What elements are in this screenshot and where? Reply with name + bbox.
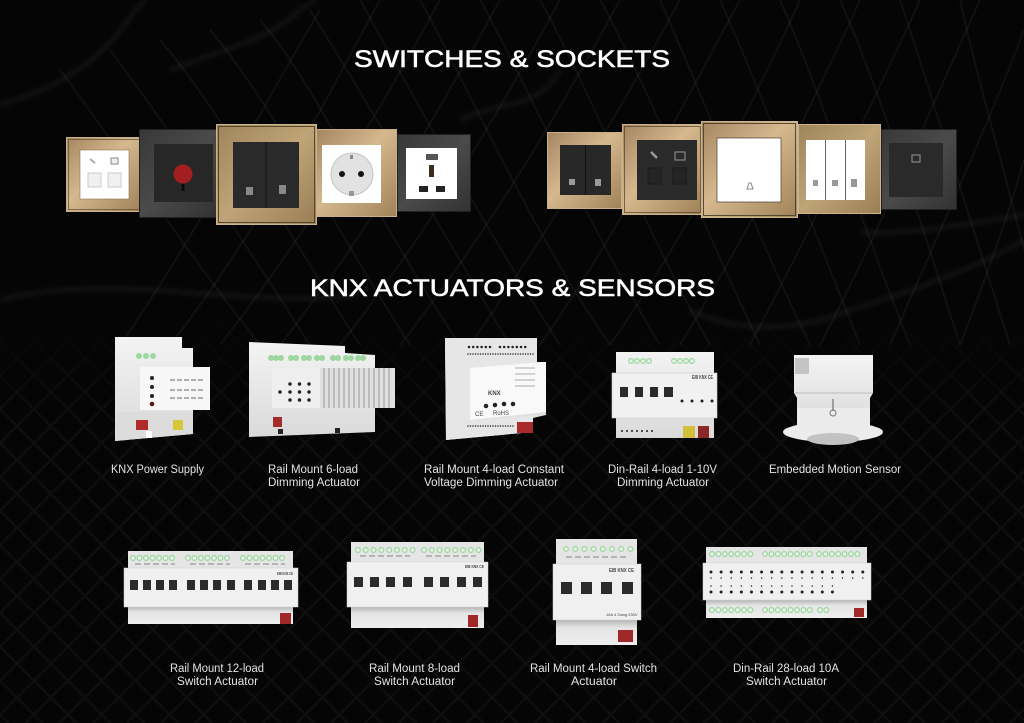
label: 8-load switch actuator: Switch Actuator <box>374 676 455 688</box>
label: 12-load switch actuator <box>170 663 264 688</box>
plate: dark data socket on dark frame <box>882 130 956 210</box>
label: knx power supply: KNX Power Supply <box>111 464 204 476</box>
label: 4-load constant voltage dimming actuator: Voltage Dimming Actuator <box>424 477 558 489</box>
product: 4-load switch actuator: 16A 4 Gang 230V <box>606 612 638 617</box>
product: 4-load constant voltage dimming actuator: CE <box>475 412 483 418</box>
label: 4-load switch actuator: Rail Mount 4-load Switch <box>530 663 657 675</box>
product: 12-load switch actuator <box>124 551 298 624</box>
background ridges <box>0 0 1024 327</box>
product: 12-load switch actuator: EIB KNX CE <box>277 571 293 576</box>
product: knx power supply <box>115 337 210 441</box>
label: 4-load constant voltage dimming actuator: Rail Mount 4-load Constant <box>424 464 565 476</box>
label: 6-load dimming actuator: Dimming Actuator <box>268 477 360 489</box>
label: 28-load switch actuator <box>733 663 839 688</box>
title: knx actuators and sensors: KNX ACTUATORS & SENSORS <box>310 275 715 302</box>
label: 4-load switch actuator: Actuator <box>571 676 617 688</box>
background diamond texture <box>0 420 1024 723</box>
title: switches and sockets: SWITCHES & SOCKETS <box>354 46 670 73</box>
product: din-rail 4-load 1-10v dimming actuator: EIB KNX CE <box>692 375 713 381</box>
plate: white schuko socket on gold frame <box>316 130 396 216</box>
label: 12-load switch actuator: Switch Actuator <box>177 676 258 688</box>
plate: white data socket on gold frame <box>66 138 140 212</box>
product: 6-load dimming actuator <box>249 342 395 437</box>
product: din-rail 4-load 1-10v dimming actuator <box>612 352 717 438</box>
label: 6-load dimming actuator: Rail Mount 6-load <box>268 464 358 476</box>
label: 4-load switch actuator <box>530 663 657 688</box>
label: din-rail 4-load 1-10v dimming actuator: Dimming Actuator <box>617 477 709 489</box>
product: 4-load constant voltage dimming actuator: RoHS <box>493 411 509 417</box>
plate: dark two-gang small switch on gold frame <box>548 132 622 208</box>
label: 4-load constant voltage dimming actuator <box>424 464 565 489</box>
product: 8-load switch actuator: EIB KNX CE <box>465 564 484 569</box>
label: embedded motion sensor: Embedded Motion Sensor <box>769 464 901 476</box>
plate: white universal socket on dark frame <box>398 134 470 212</box>
plate: white three-gang switch on gold frame <box>798 124 880 214</box>
product: 4-load constant voltage dimming actuator <box>445 338 546 440</box>
plate: dark two-gang switch on gold frame <box>216 124 316 224</box>
label: 8-load switch actuator: Rail Mount 8-load <box>369 663 460 675</box>
plate: white doorbell on gold frame <box>702 122 798 218</box>
plate: dark data socket on gold frame <box>622 124 700 214</box>
label: 12-load switch actuator: Rail Mount 12-load <box>170 663 264 675</box>
label: 8-load switch actuator <box>369 663 460 688</box>
label: din-rail 4-load 1-10v dimming actuator: Din-Rail 4-load 1-10V <box>608 464 717 476</box>
switch row left <box>66 124 470 224</box>
plate: red emergency button on dark frame <box>140 130 216 218</box>
label: 28-load switch actuator: Switch Actuator <box>746 676 827 688</box>
background mesh <box>60 0 1024 345</box>
label: 6-load dimming actuator <box>268 464 360 489</box>
label: din-rail 4-load 1-10v dimming actuator <box>608 464 717 489</box>
product: 4-load switch actuator <box>553 539 641 645</box>
product: embedded motion sensor <box>783 355 883 445</box>
label: 28-load switch actuator: Din-Rail 28-load 10A <box>733 663 839 675</box>
switch row right <box>548 122 956 218</box>
product: 4-load constant voltage dimming actuator: KNX <box>488 391 501 397</box>
product: 8-load switch actuator <box>347 542 488 628</box>
product: 28-load switch actuator <box>703 547 871 618</box>
product: 4-load switch actuator: EIB KNX CE <box>609 568 635 574</box>
